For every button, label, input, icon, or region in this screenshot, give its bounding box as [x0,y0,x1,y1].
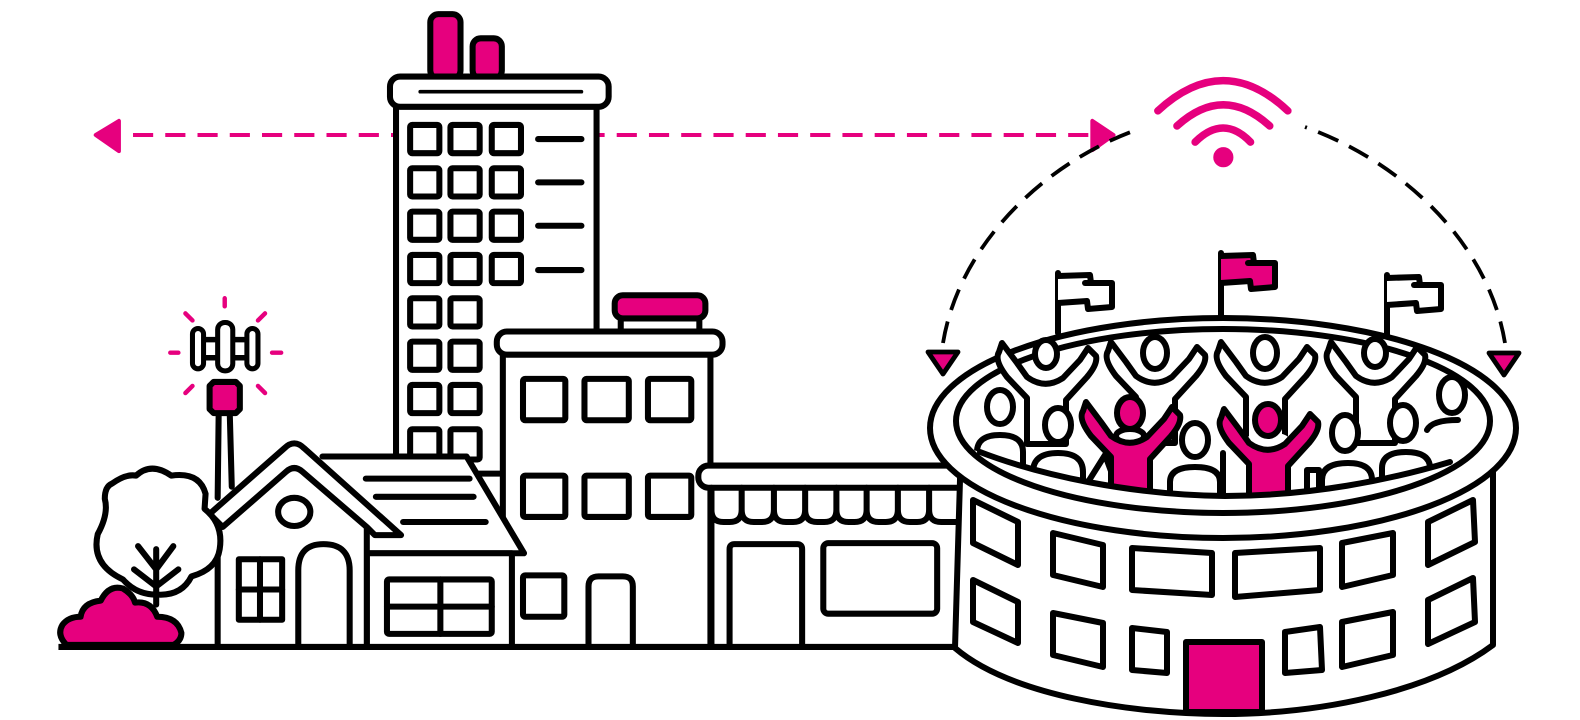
stadium lower windows [973,578,1475,673]
pink cheering fans [1078,394,1322,493]
wifi symbol [1158,81,1288,164]
seated fans right [1382,377,1465,480]
pink tower box [210,382,240,413]
stadium wall [955,430,1493,714]
house [210,443,524,647]
mid-rise windows [523,379,691,617]
bush [60,588,181,645]
back row fans [998,337,1425,444]
building: mid-rise [497,295,723,647]
front seated fans [1170,415,1372,500]
arc end triangles [928,352,1519,375]
garage wing wall [367,553,512,647]
outer rim [930,318,1516,538]
garage door [387,579,492,634]
garage wing roof [322,456,524,553]
front rim crescent [980,452,1450,496]
left flag [1058,273,1112,333]
pink dashed arrow line [96,121,1114,151]
stadium entrance door [1186,642,1262,712]
mid-rise door [588,576,633,647]
tower roof cap [390,77,609,107]
antenna array [192,322,258,371]
house window [239,559,282,620]
chimney pink tall [430,14,461,79]
pink rooftop unit [615,295,705,318]
tower windows [410,125,521,460]
right flag [1387,275,1441,335]
cell tower [170,298,281,498]
mast [218,413,232,498]
shop window [823,543,937,614]
chimney pink short [473,38,502,79]
house gable roof [210,443,401,535]
round attic window [278,498,310,526]
tower side dashes [538,139,581,270]
building: tall tower [390,14,609,474]
seated fans left [974,387,1108,480]
stadium upper windows [973,500,1475,597]
city buildings [58,14,1114,647]
house door [298,544,350,647]
flags [1058,253,1441,335]
shop awning scallops [711,488,957,522]
signal rays [170,298,281,393]
building: shop [698,466,975,647]
dashed coverage arc [943,127,1505,343]
crowd [977,337,1465,510]
tree [96,469,220,605]
centre pink flag [1221,253,1275,315]
shop door [730,544,802,647]
stadium [930,253,1516,714]
inner rim [956,329,1490,513]
ground line [58,644,957,650]
house front wall [218,453,367,647]
